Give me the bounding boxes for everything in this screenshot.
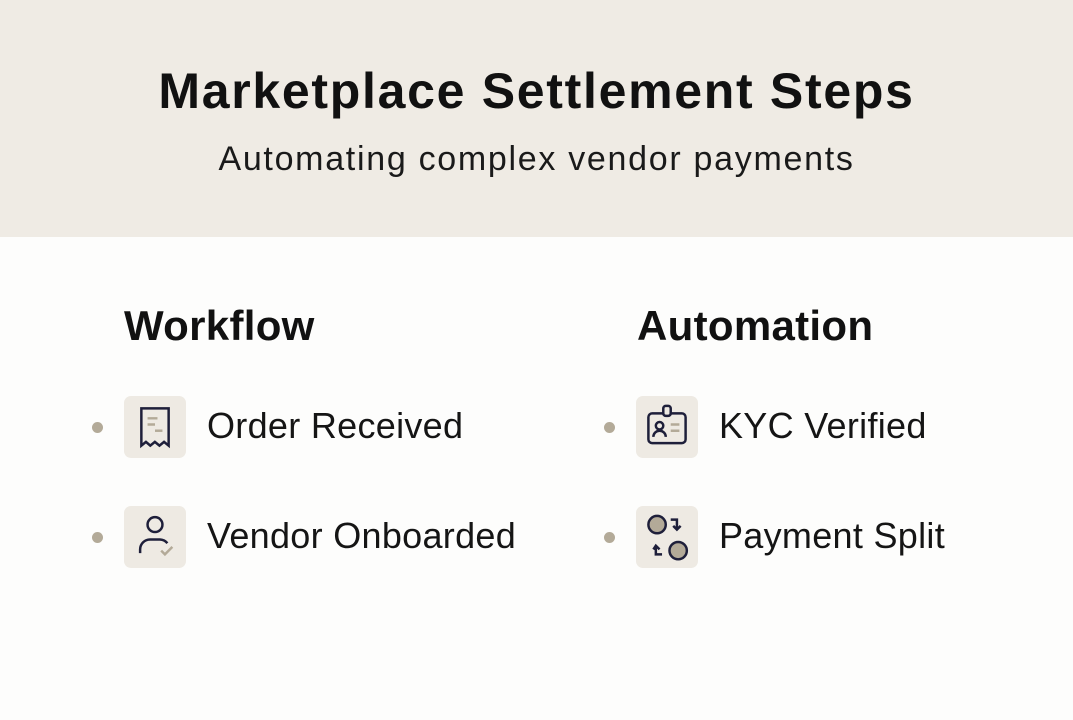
- icon: exchange coins: [636, 506, 698, 568]
- heading: Workflow: Workflow: [124, 302, 315, 349]
- label: KYC Verified: [719, 405, 927, 446]
- bullet: [92, 532, 103, 543]
- header band: [0, 0, 1073, 237]
- icon: id badge: [636, 396, 698, 458]
- label: Payment Split: [719, 515, 945, 556]
- icon: user check: [124, 506, 186, 568]
- bullet: [604, 532, 615, 543]
- item: Vendor Onboarded: [92, 506, 516, 568]
- heading: Automation: Automation: [637, 302, 873, 349]
- item: KYC Verified: [604, 396, 927, 458]
- bullet: [92, 422, 103, 433]
- title: Marketplace Settlement Steps: [158, 63, 915, 119]
- label: Vendor Onboarded: [207, 515, 516, 556]
- item: Order Received: [92, 396, 463, 458]
- icon: receipt: [124, 396, 186, 458]
- bullet: [604, 422, 615, 433]
- item: Payment Split: [604, 506, 945, 568]
- subtitle: Automating complex vendor payments: [218, 140, 855, 178]
- label: Order Received: [207, 405, 463, 446]
